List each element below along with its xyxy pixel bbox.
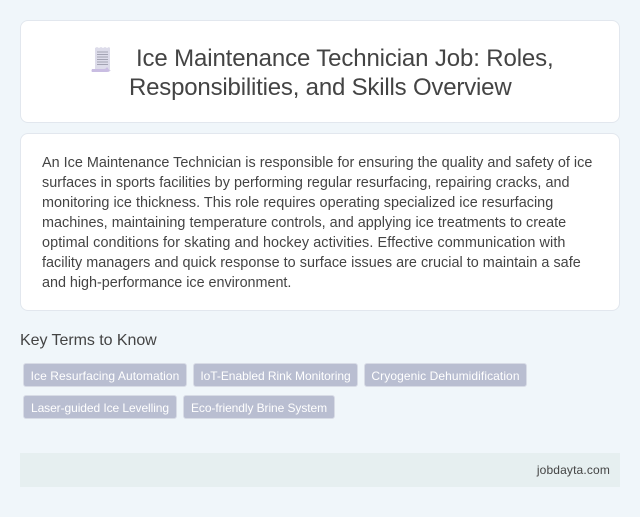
text block: description: An Ice Maintenance Technician is responsible for ensuring the quality and safety of ice [42,155,592,171]
footer text: jobdayta.com [537,463,610,477]
text block: description: optimal conditions for skating and hockey activities. Effective communication with [42,235,566,251]
text block: description: and high-performance ice environment. [42,275,291,291]
heading: key terms: Key Terms to Know [20,332,157,349]
title [129,45,554,101]
tag [23,395,177,419]
tag: IoT-Enabled Rink Monitoring [200,369,351,383]
panel: description [20,133,620,311]
text block: description [42,155,592,291]
footer bar [20,453,620,487]
tag: Eco-friendly Brine System [191,401,327,415]
tags: key terms [23,363,527,419]
panel: title card [20,20,620,123]
text block: description: facility managers and quick response to surface issues are crucial to maintain a safe [42,255,581,271]
title: Ice Maintenance Technician Job: Roles, [136,45,554,72]
title: Responsibilities, and Skills Overview [129,74,511,101]
tag [183,395,335,419]
tag [23,363,187,387]
text block: description: monitoring ice thickness. This role requires operating specialized ice resurfacing [42,195,553,211]
tag: Cryogenic Dehumidification [371,369,520,383]
tag: Laser-guided Ice Levelling [31,401,169,415]
text block: description: machines, maintaining temperature controls, and applying ice treatments to create [42,215,566,231]
tag [193,363,358,387]
icon: document receipt [92,47,111,72]
tag [364,363,527,387]
text block: description: surfaces in sports facilities by performing regular resurfacing, repairing cracks, and [42,175,570,191]
tag: Ice Resurfacing Automation [31,369,179,383]
